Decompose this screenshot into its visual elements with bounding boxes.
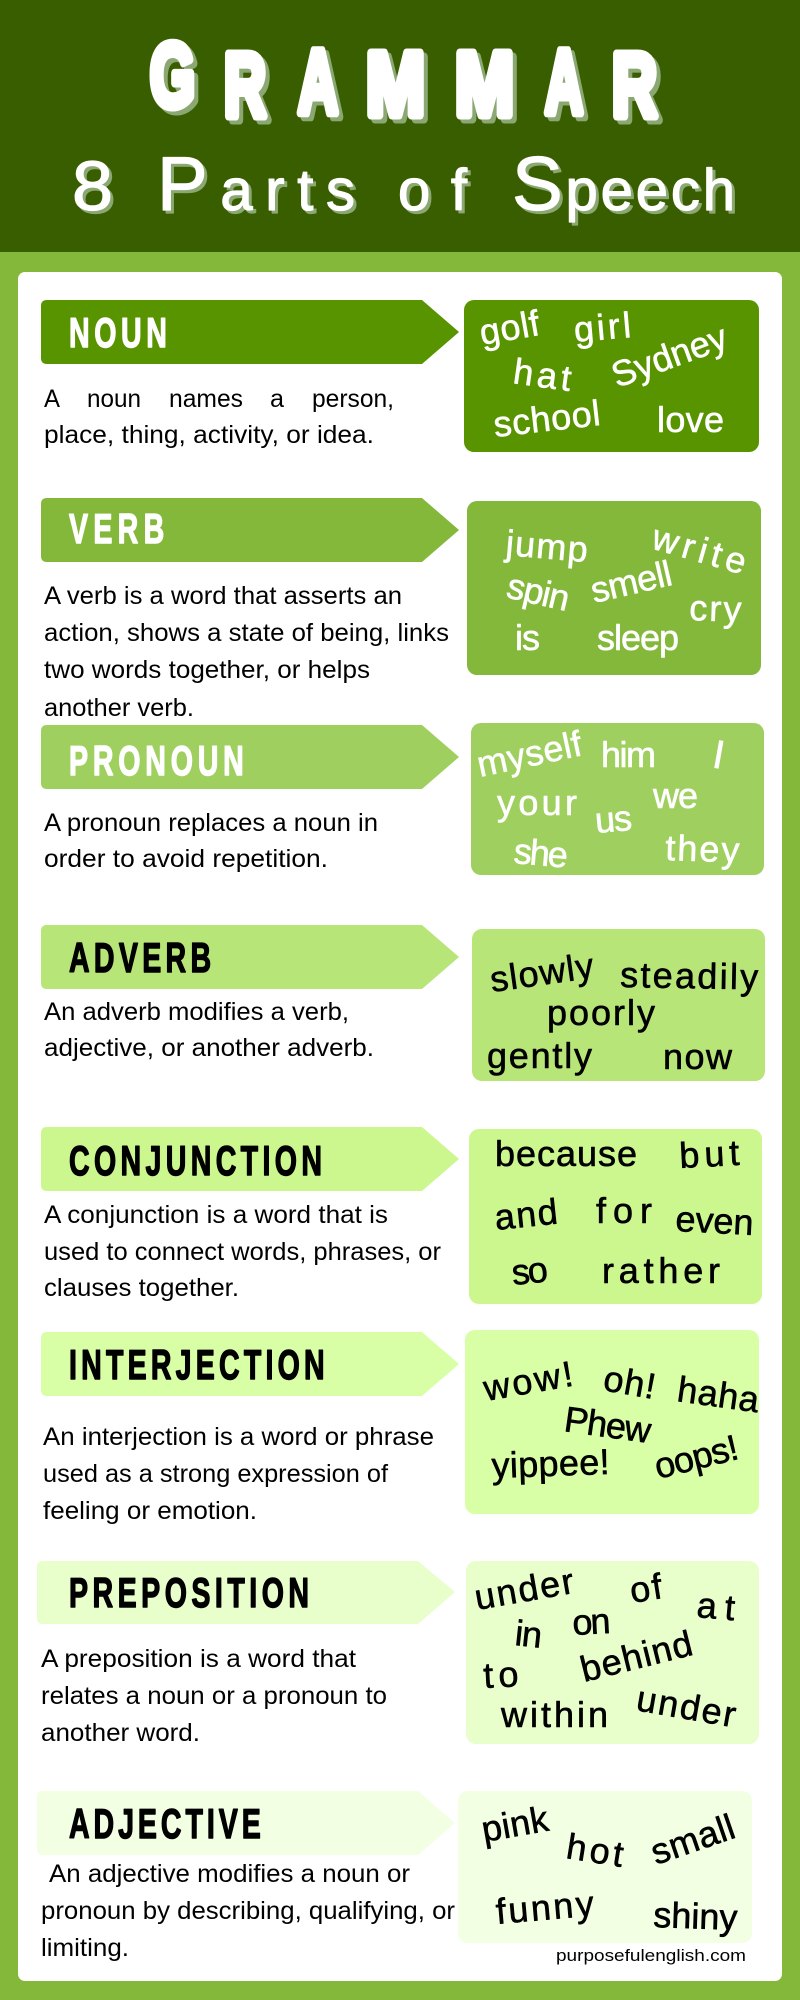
word card: pronoun examples: they: [665, 827, 740, 871]
word card: pronoun examples: we: [652, 775, 698, 816]
definition: noun: [44, 385, 394, 449]
subtitle: 8 Parts of Speech: [72, 142, 735, 227]
word card: adjective examples: pink: [478, 1798, 552, 1850]
subtitle: 8 Parts of Speech: Speech: [512, 142, 735, 227]
word card: interjection examples: Phew: [562, 1398, 655, 1451]
definition: adverb: adjective, or another adverb.: [44, 1034, 374, 1062]
word card: noun examples: Sydney: [606, 316, 732, 396]
definition: verb: action, shows a state of being, links: [44, 619, 449, 647]
word card: preposition examples: [466, 1560, 759, 1744]
definition: pronoun: A pronoun replaces a noun in: [44, 809, 378, 837]
title: GRAMMAR: A: [298, 33, 338, 133]
arrow banner: verb: [41, 498, 459, 562]
word card: verb examples: smell: [587, 552, 676, 611]
heading: pronoun: PRONOUN: [69, 736, 244, 784]
word card: preposition examples: of: [627, 1565, 666, 1611]
subtitle: 8 Parts of Speech: 8: [72, 147, 113, 225]
word card: pronoun examples: [471, 722, 764, 876]
word card: verb examples: jump: [503, 522, 590, 570]
word card: adjective examples: shiny: [653, 1894, 738, 1938]
definition: conjunction: clauses together.: [44, 1274, 239, 1302]
word card: preposition examples: to: [482, 1653, 519, 1696]
definition: pronoun: order to avoid repetition.: [44, 845, 328, 873]
section: interjection: [41, 1330, 763, 1525]
definition: preposition: another word.: [41, 1719, 200, 1747]
word card: adjective examples: [458, 1791, 752, 1943]
word card: preposition examples: under: [471, 1560, 577, 1618]
word card: pronoun examples: your: [497, 782, 577, 823]
arrow banner: pronoun: [41, 725, 459, 789]
definition: interjection: An interjection is a word or phrase: [43, 1423, 434, 1451]
definition: interjection: [43, 1423, 434, 1525]
section: adverb: [41, 925, 765, 1081]
word card: preposition examples: on: [571, 1600, 611, 1643]
definition: adjective: [41, 1860, 455, 1962]
word card: conjunction examples: [469, 1129, 762, 1304]
definition: verb: two words together, or helps: [44, 656, 370, 684]
title: GRAMMAR: M: [366, 35, 425, 135]
section: pronoun: [41, 722, 764, 876]
word card: adverb examples: gently: [487, 1035, 592, 1076]
definition: interjection: feeling or emotion.: [43, 1497, 257, 1525]
word card: pronoun examples: I: [709, 733, 728, 778]
definition: conjunction: used to connect words, phrases, or: [44, 1238, 441, 1266]
definition: adverb: An adverb modifies a verb,: [44, 998, 349, 1026]
definition: preposition: A preposition is a word that: [41, 1645, 356, 1673]
word card: preposition examples: in: [513, 1612, 544, 1656]
word card: preposition examples: behind: [576, 1622, 697, 1690]
word card: adjective examples: hot: [564, 1825, 626, 1875]
word card: adverb examples: now: [663, 1036, 733, 1077]
website credit: purposefulenglish.com: [556, 1946, 746, 1965]
definition: noun: a: [270, 385, 284, 413]
word card: interjection examples: oh!: [601, 1358, 659, 1407]
heading: adjective: ADJECTIVE: [69, 1799, 261, 1847]
definition: verb: A verb is a word that asserts an: [44, 582, 402, 610]
word card: adjective examples: small: [645, 1806, 740, 1873]
heading: adverb: ADVERB: [69, 933, 211, 981]
definition: conjunction: A conjunction is a word that is: [44, 1201, 388, 1229]
section: verb: [41, 498, 761, 722]
word card: conjunction examples: for: [596, 1190, 652, 1231]
word card: adverb examples: [472, 929, 765, 1081]
header band: [0, 0, 800, 252]
word card: interjection examples: wow!: [479, 1353, 576, 1409]
subtitle: 8 Parts of Speech: of: [398, 158, 468, 223]
definition: noun: place, thing, activity, or idea.: [44, 421, 374, 449]
word card: interjection examples: yippee!: [491, 1441, 610, 1486]
title: GRAMMAR: R: [612, 36, 657, 136]
definition: conjunction: [44, 1201, 441, 1302]
definition: noun: noun: [87, 385, 141, 413]
word card: noun examples: golf: [476, 302, 543, 353]
title: GRAMMAR: [150, 26, 657, 136]
word card: pronoun examples: myself: [473, 722, 586, 785]
word card: interjection examples: [465, 1330, 763, 1514]
word card: verb examples: [467, 501, 761, 675]
definition: noun: names: [169, 385, 243, 413]
heading: interjection: INTERJECTION: [69, 1340, 325, 1388]
word card: conjunction examples: rather: [602, 1250, 720, 1291]
word card: noun examples: school: [491, 392, 602, 445]
section: noun: [41, 300, 759, 452]
word card: adverb examples: steadily: [620, 954, 759, 997]
title: GRAMMAR: M: [455, 35, 514, 135]
word card: pronoun examples: him: [601, 734, 656, 775]
word card: pronoun examples: she: [512, 830, 570, 876]
word card: verb examples: sleep: [597, 617, 679, 658]
definition: adjective: An adjective modifies a noun or: [49, 1860, 410, 1888]
word card: conjunction examples: and: [493, 1191, 559, 1238]
definition: preposition: [41, 1645, 387, 1747]
word card: conjunction examples: but: [678, 1132, 740, 1176]
word card: noun examples: love: [657, 399, 724, 440]
word card: verb examples: spin: [503, 565, 574, 619]
definition: verb: [44, 582, 449, 722]
word card: preposition examples: at: [695, 1584, 737, 1628]
word card: interjection examples: haha: [675, 1368, 763, 1420]
word card: verb examples: cry: [689, 587, 742, 630]
section: adjective: [37, 1791, 752, 1962]
word card: conjunction examples: because: [495, 1133, 637, 1174]
definition: adjective: limiting.: [41, 1934, 129, 1962]
word card: verb examples: is: [515, 617, 540, 658]
word card: noun examples: hat: [511, 350, 574, 399]
word card: conjunction examples: even: [675, 1198, 755, 1243]
word card: verb examples: write: [647, 516, 751, 582]
word card: pronoun examples: us: [593, 797, 634, 841]
heading: preposition: PREPOSITION: [69, 1568, 309, 1616]
arrow banner: adverb: [41, 925, 459, 989]
arrow banner: adjective: [37, 1791, 455, 1855]
word card: noun examples: [464, 300, 759, 452]
section: preposition: [37, 1560, 759, 1747]
definition: pronoun: [44, 809, 378, 873]
word card: preposition examples: under: [634, 1678, 739, 1735]
subtitle: 8 Parts of Speech: Parts: [157, 142, 355, 227]
word card: interjection examples: oops!: [650, 1426, 742, 1487]
definition: adjective: pronoun by describing, qualifying, or: [41, 1897, 455, 1925]
arrow banner: preposition: [37, 1561, 455, 1624]
heading: verb: VERB: [69, 504, 164, 552]
definition: verb: another verb.: [44, 694, 194, 722]
word card: adverb examples: slowly: [487, 945, 596, 1000]
title: GRAMMAR: A: [545, 33, 583, 133]
word card: preposition examples: within: [500, 1694, 608, 1735]
definition: interjection: used as a strong expression of: [43, 1460, 388, 1488]
arrow banner: interjection: [41, 1332, 459, 1396]
heading: conjunction: CONJUNCTION: [69, 1136, 322, 1184]
word card: noun examples: girl: [572, 304, 632, 350]
word card: adverb examples: poorly: [547, 992, 655, 1033]
definition: noun: person,: [312, 385, 394, 413]
word card: conjunction examples: so: [510, 1248, 550, 1293]
heading: noun: NOUN: [69, 308, 167, 356]
definition: noun: A: [44, 385, 60, 413]
definition: adverb: [44, 998, 374, 1062]
arrow banner: noun: [41, 300, 459, 364]
title: GRAMMAR: R: [224, 36, 266, 136]
section: conjunction: [41, 1127, 762, 1304]
word card: adjective examples: funny: [494, 1883, 595, 1932]
title: GRAMMAR: G: [150, 26, 195, 126]
definition: preposition: relates a noun or a pronoun to: [41, 1682, 387, 1710]
arrow banner: conjunction: [41, 1127, 459, 1191]
